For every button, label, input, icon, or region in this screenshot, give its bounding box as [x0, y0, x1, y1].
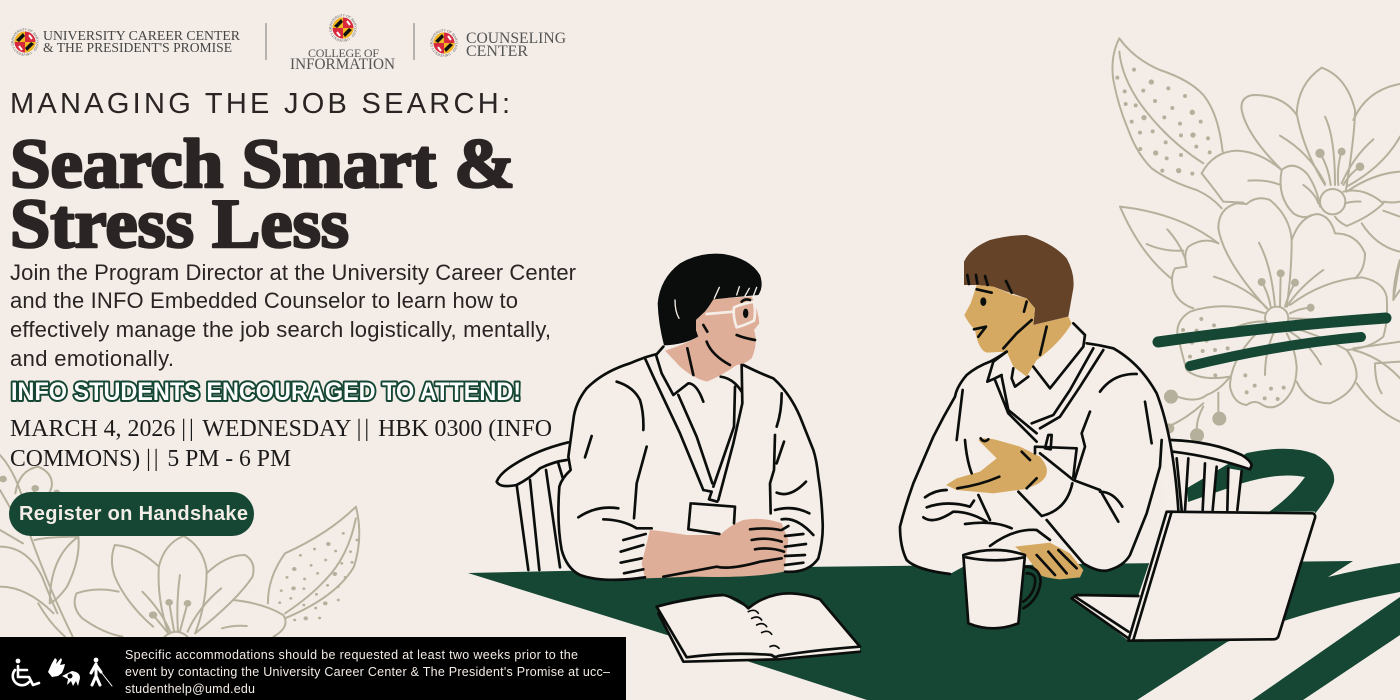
seated person left with chair: [497, 254, 823, 580]
event details: COMMONS) || 5 PM - 6 PM: [10, 446, 291, 472]
icon: sign language: [48, 658, 80, 686]
right person hair: [964, 235, 1074, 325]
description: and emotionally.: [10, 346, 174, 371]
floral illustration: bottom left: [0, 455, 359, 637]
title: Stress Less: [10, 186, 349, 263]
description: and the INFO Embedded Counselor to learn how to: [10, 288, 518, 313]
open spiral notebook: [657, 593, 860, 662]
accessibility text: event by contacting the University Career Center & The President's Promise at ucc–: [125, 665, 610, 679]
register button: Register on Handshake: [19, 503, 248, 525]
green lower stripe: [1252, 597, 1400, 700]
green swoosh behind right chair: [1187, 449, 1334, 516]
title: Search Smart &: [10, 126, 515, 203]
green accent strokes over flowers: [1158, 318, 1386, 366]
laptop: [1072, 512, 1315, 641]
right person lower hand: [1015, 543, 1083, 579]
logo: Counseling Center: [430, 29, 566, 60]
left person hair: [658, 254, 762, 345]
accessibility text: Specific accommodations should be requested at least two weeks prior to the: [125, 648, 578, 662]
accessibility text: [125, 648, 610, 696]
logo: University Career Center: & THE PRESIDENT'S PROMISE: [43, 41, 232, 56]
coffee mug: [963, 550, 1041, 628]
seated person right with chair: [900, 235, 1252, 579]
accommodations footer: [0, 637, 626, 700]
title: [10, 126, 515, 263]
floral illustration: top right: [1112, 38, 1400, 442]
register button: [9, 492, 254, 536]
icon: person with cane: [91, 658, 112, 686]
event details: MARCH 4, 2026 || WEDNESDAY || HBK 0300 (INFO: [10, 416, 552, 442]
logo: College of Information: INFORMATION: [290, 56, 395, 73]
seal 3: UNIVERSITY OF MARYLAND · UNIVERSITY OF MARYLAND: [430, 29, 458, 57]
accessibility text: studenthelp@umd.edu: [125, 682, 255, 696]
seal 1: UNIVERSITY OF MARYLAND · UNIVERSITY OF MARYLAND: [11, 28, 39, 56]
callout: INFO students: INFO STUDENTS ENCOURAGED TO ATTEND!: [11, 378, 521, 406]
logo row: [11, 14, 566, 73]
description: [10, 260, 576, 371]
logo: Counseling Center: CENTER: [466, 43, 529, 60]
seal 2: UNIVERSITY OF MARYLAND · UNIVERSITY OF MARYLAND: [329, 14, 357, 42]
description: effectively manage the job search logistically, mentally,: [10, 317, 551, 342]
logo: College of Information: [290, 14, 395, 73]
left person shirt: [558, 354, 823, 580]
logo: Counseling Center: COUNSELING: [466, 30, 566, 47]
right person face and neck: [964, 285, 1072, 377]
left person face and neck: [665, 297, 759, 382]
logo: University Career Center: UNIVERSITY CAREER CENTER: [43, 29, 241, 44]
right person raised hand: [946, 438, 1047, 493]
left person hair highlights: [675, 287, 757, 318]
logo: University Career Center: [11, 28, 241, 56]
right person shirt: [900, 323, 1178, 574]
logo: College of Information: COLLEGE OF: [308, 46, 379, 60]
green table: [468, 561, 1400, 700]
left person arms: [642, 519, 788, 578]
event details: [10, 416, 552, 472]
right chair: [1172, 440, 1252, 510]
left person glasses: [707, 302, 755, 327]
left person line work: [558, 299, 823, 580]
description: Join the Program Director at the University Career Center: [10, 260, 576, 285]
right person line work: [900, 275, 1178, 575]
left chair: [497, 442, 568, 571]
icon: wheelchair: [13, 659, 39, 685]
eyebrow heading: MANAGING THE JOB SEARCH:: [10, 88, 510, 120]
